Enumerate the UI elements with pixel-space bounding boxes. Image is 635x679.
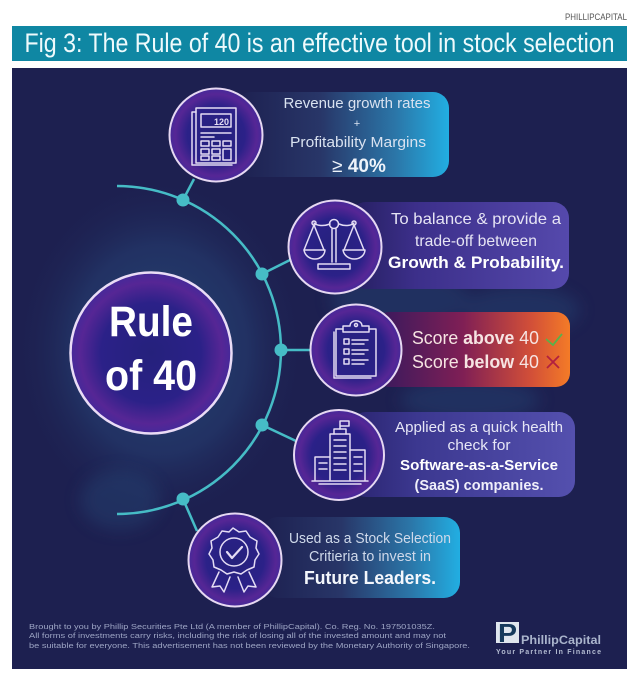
panel: stock selection criteria: Future Leaders. xyxy=(304,568,436,588)
logo: PhillipCapital: Your Partner In Finance xyxy=(496,649,601,656)
logo: PhillipCapital: PhillipCapital xyxy=(521,635,601,647)
panel: score above or below 40: Score above 40 xyxy=(412,328,539,348)
central circle: Rule of 40 xyxy=(70,272,232,434)
logo: PhillipCapital xyxy=(496,618,601,656)
panel: stock selection criteria: Used as a Stock Selection xyxy=(289,531,451,547)
panel: balance growth and probability xyxy=(350,202,569,289)
panel: SaaS health check xyxy=(350,412,575,497)
disclaimer text: Brought to you by Phillip Securities Pte Ltd (A member of PhillipCapital). Co. Reg. No. 197501035Z. xyxy=(29,624,435,631)
panel: SaaS health check: check for xyxy=(448,437,511,454)
panel: SaaS health check: Applied as a quick health xyxy=(395,419,563,436)
central circle: Rule of 40: of 40 xyxy=(105,352,197,400)
arc connector with nodes xyxy=(117,179,312,531)
panel: score above or below 40 xyxy=(375,312,570,387)
icon: check mark xyxy=(546,334,562,345)
panel: revenue plus margins: ≥ 40% xyxy=(332,156,386,177)
icon: calculator: 120 xyxy=(214,117,229,127)
panel: SaaS health check: (SaaS) companies. xyxy=(414,477,544,494)
panel: balance growth and probability: trade-off between xyxy=(415,233,537,250)
panel: revenue plus margins xyxy=(235,92,449,177)
panel: revenue plus margins: Profitability Margins xyxy=(290,134,426,151)
icon: award rosette xyxy=(188,514,282,606)
icon: clipboard checklist xyxy=(310,304,402,396)
panel: SaaS health check: Software-as-a-Service xyxy=(400,457,558,474)
central circle: Rule of 40: Rule xyxy=(109,298,193,346)
panel: balance growth and probability: To balance & provide a xyxy=(391,211,561,228)
icon: scales xyxy=(288,200,382,294)
icon: calculator xyxy=(170,88,262,182)
source label: PHILLIPCAPITAL xyxy=(565,12,627,22)
logo: PhillipCapital: P xyxy=(498,618,517,648)
disclaimer text: All forms of investments carry risks, including the risk of losing all of the invested amount and may not xyxy=(29,633,446,640)
panel: balance growth and probability: Growth & Probability. xyxy=(388,253,564,272)
panel: stock selection criteria: Critieria to invest in xyxy=(309,549,431,565)
panel: stock selection criteria xyxy=(262,517,460,598)
icon: office buildings xyxy=(294,410,384,500)
disclaimer text: be suitable for everyone. This advertisement has not been reviewed by the Monetary Authority of Singapore. xyxy=(29,643,470,650)
panel: revenue plus margins: + xyxy=(354,118,360,130)
panel: score above or below 40: Score below 40 xyxy=(412,352,539,372)
icon: cross mark xyxy=(547,356,559,368)
panel: revenue plus margins: Revenue growth rates xyxy=(284,95,430,112)
disclaimer text xyxy=(29,624,470,650)
